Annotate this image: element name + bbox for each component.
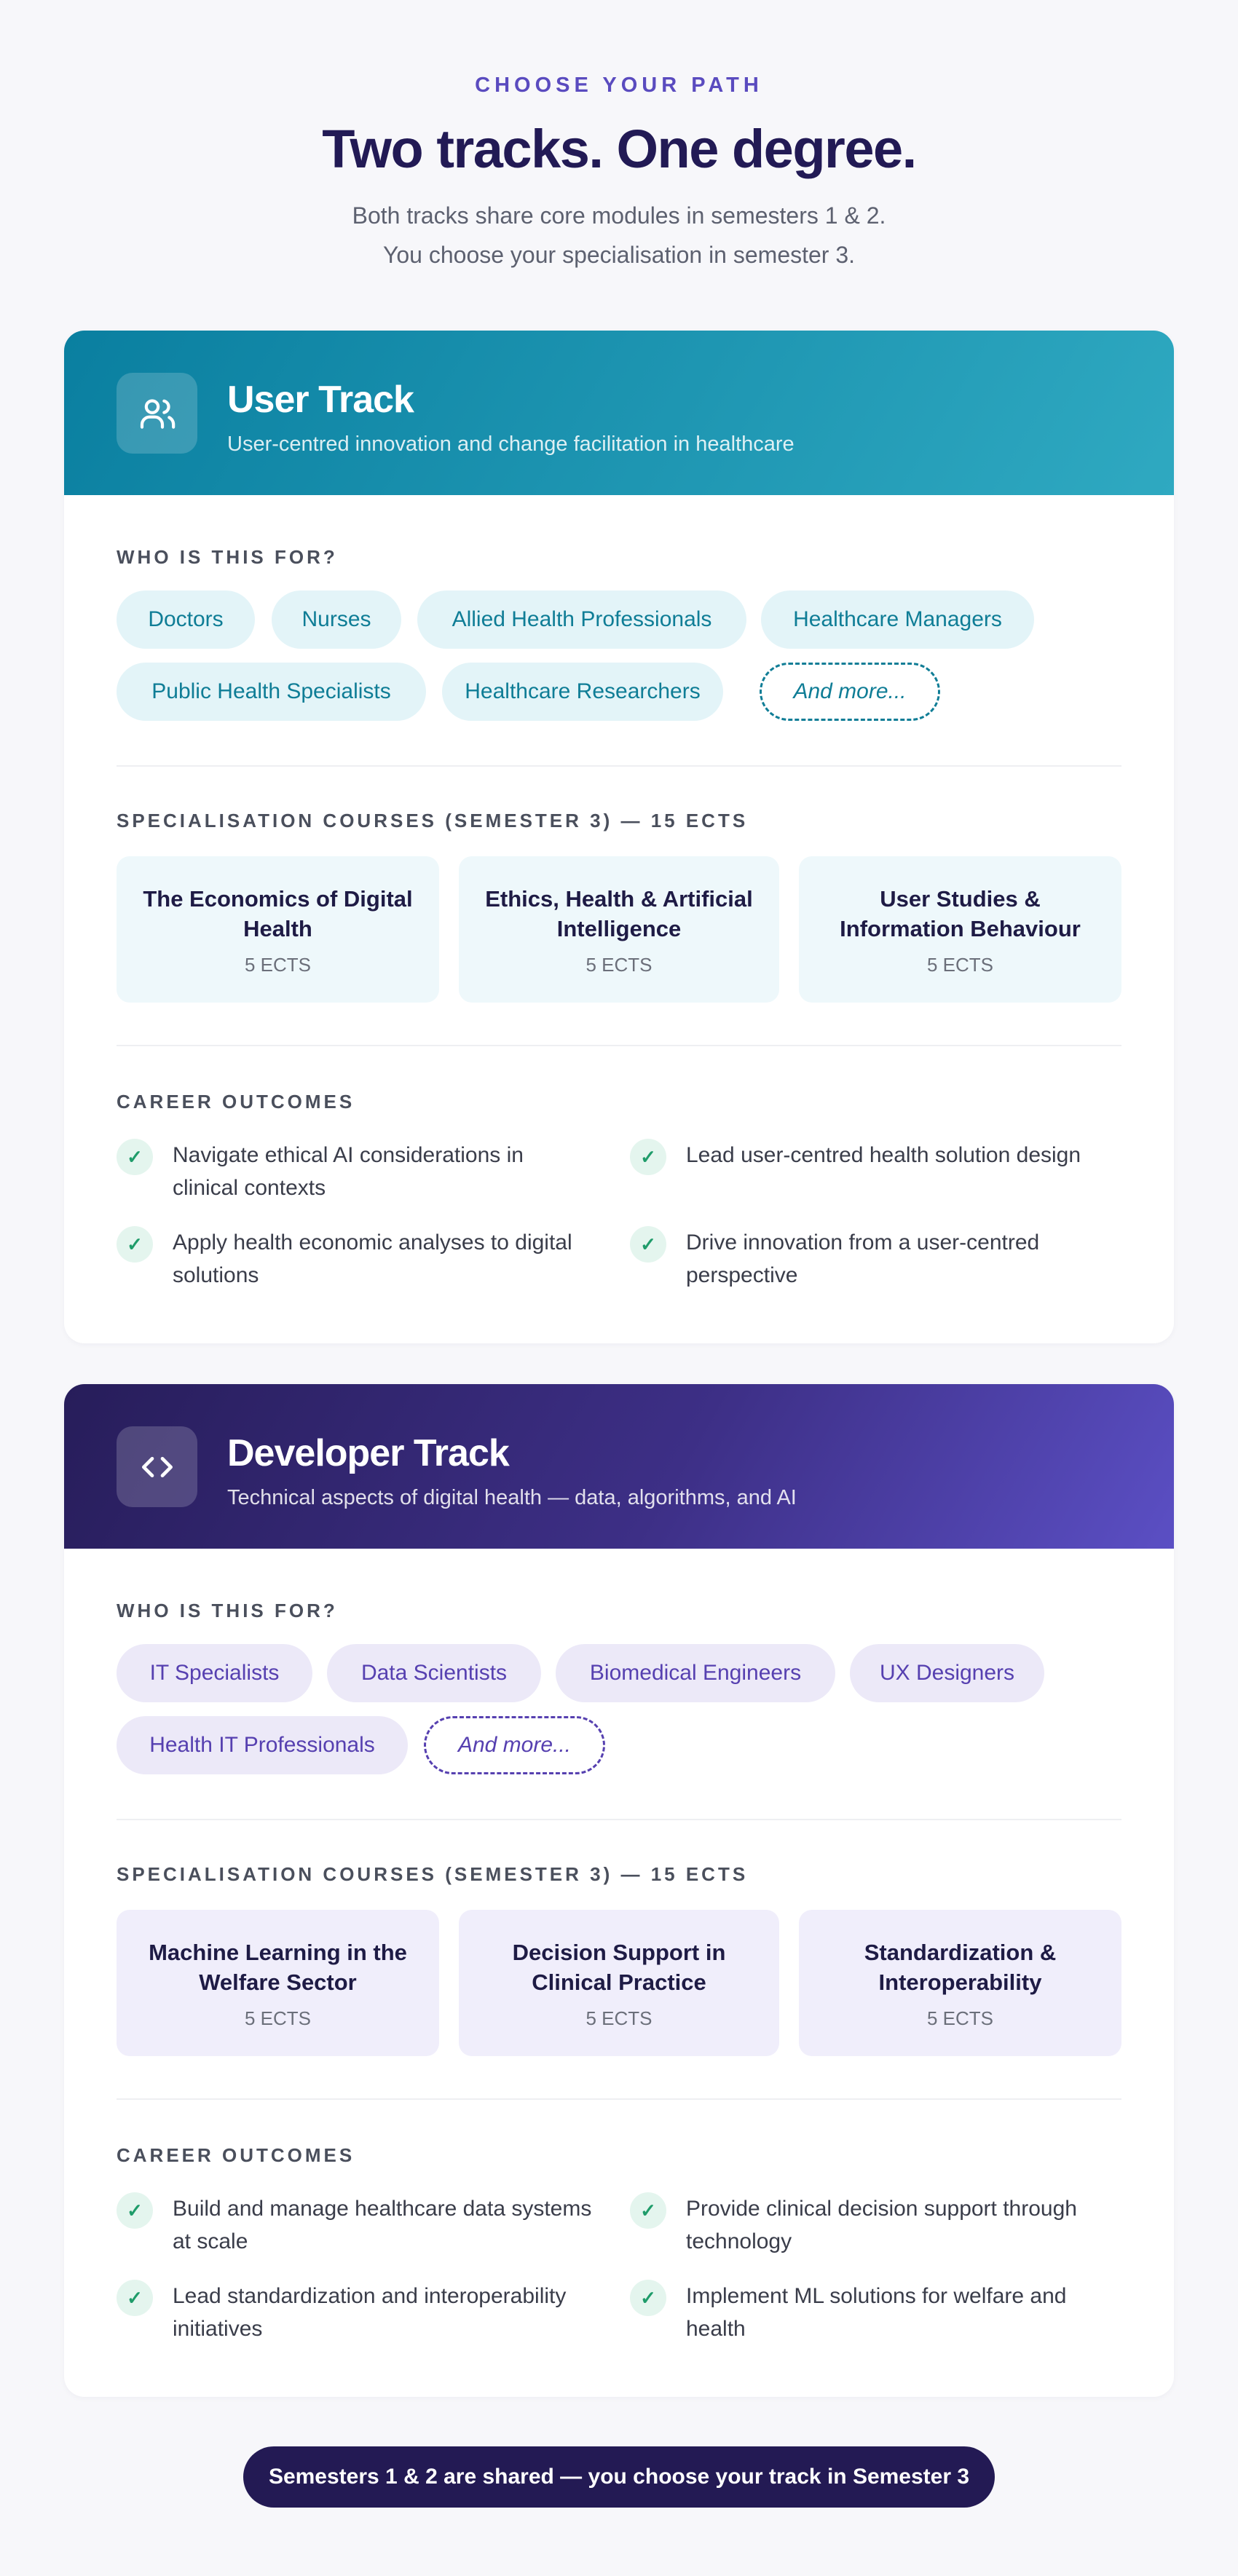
chips: audience: And more... [458, 1733, 571, 1757]
career outcomes list: initiatives [173, 2317, 262, 2341]
course cards [117, 1910, 1121, 2056]
career outcomes list: Implement ML solutions for welfare and [686, 2284, 1066, 2308]
chips: audience: Healthcare Managers [793, 607, 1002, 631]
course cards: Clinical Practice [532, 1969, 706, 1995]
footer pill: Semesters 1 & 2 are shared — you choose your track in Semester 3 [269, 2465, 969, 2489]
course cards: 5 ECTS [245, 954, 311, 976]
label: who: WHO IS THIS FOR? [117, 1600, 338, 1621]
chips: audience: Data Scientists [361, 1661, 507, 1685]
course cards: Standardization & [864, 1940, 1056, 1965]
chips: audience: Healthcare Researchers [465, 679, 701, 703]
footer pill [243, 2446, 995, 2508]
eyebrow: CHOOSE YOUR PATH [475, 74, 763, 97]
career outcomes list [117, 1139, 1081, 1287]
panel: user track [64, 331, 1174, 1343]
course cards: Health [243, 916, 312, 941]
career outcomes list [117, 2192, 1077, 2341]
career outcomes list: ✓ [127, 1146, 143, 1168]
career outcomes list: ✓ [640, 2199, 656, 2221]
subtitle: You choose your specialisation in semester 3. [383, 242, 855, 268]
label: courses: SPECIALISATION COURSES (SEMESTER 3) — 15 ECTS [117, 810, 748, 831]
course cards: 5 ECTS [927, 2007, 993, 2029]
career outcomes list: perspective [686, 1263, 797, 1287]
career outcomes list: clinical contexts [173, 1176, 326, 1200]
career outcomes list: Provide clinical decision support through [686, 2197, 1077, 2221]
career outcomes list: at scale [173, 2229, 248, 2253]
track subtitle: User-centred innovation and change facilitation in healthcare [227, 432, 795, 456]
career outcomes list: solutions [173, 1263, 259, 1287]
course cards: 5 ECTS [586, 954, 652, 976]
course cards: 5 ECTS [586, 2007, 652, 2029]
career outcomes list: Apply health economic analyses to digital [173, 1230, 572, 1255]
track subtitle: Technical aspects of digital health — data, algorithms, and AI [227, 1486, 797, 1509]
career outcomes list: Navigate ethical AI considerations in [173, 1143, 524, 1167]
career outcomes list: Drive innovation from a user-centred [686, 1230, 1039, 1255]
career outcomes list: ✓ [640, 1233, 656, 1255]
subtitle [352, 202, 886, 268]
label: career: CAREER OUTCOMES [117, 2144, 355, 2166]
chips: audience: Public Health Specialists [151, 679, 391, 703]
header: developer track [64, 1384, 1174, 1549]
panel: developer track [64, 1384, 1174, 2397]
chips: audience: UX Designers [880, 1661, 1014, 1685]
label: courses: SPECIALISATION COURSES (SEMESTER 3) — 15 ECTS [117, 1863, 748, 1885]
chips: audience: Doctors [148, 607, 224, 631]
course cards: Information Behaviour [840, 916, 1081, 941]
career outcomes list: ✓ [127, 2286, 143, 2308]
course cards: The Economics of Digital [143, 886, 413, 912]
title: Two tracks. One degree. [322, 119, 916, 179]
career outcomes list: health [686, 2317, 746, 2341]
career outcomes list: Build and manage healthcare data systems [173, 2197, 591, 2221]
icon: code [117, 1426, 197, 1507]
career outcomes list: ✓ [640, 2286, 656, 2308]
chips: audience [117, 590, 1034, 721]
chips: audience: Nurses [301, 607, 371, 631]
course cards [117, 856, 1121, 1003]
course cards: 5 ECTS [927, 954, 993, 976]
career outcomes list: Lead standardization and interoperability [173, 2284, 566, 2308]
career outcomes list: Lead user-centred health solution design [686, 1143, 1081, 1167]
chips: audience [117, 1644, 1044, 1774]
chips: audience: And more... [793, 679, 907, 703]
chips: audience: IT Specialists [150, 1661, 279, 1685]
career outcomes list: ✓ [127, 1233, 143, 1255]
course cards: 5 ECTS [245, 2007, 311, 2029]
subtitle: Both tracks share core modules in semesters 1 & 2. [352, 202, 886, 229]
career outcomes list: ✓ [640, 1146, 656, 1168]
course cards: Intelligence [557, 916, 681, 941]
chips: audience: Biomedical Engineers [590, 1661, 801, 1685]
icon: users [117, 373, 197, 454]
chips: audience: Allied Health Professionals [452, 607, 711, 631]
career outcomes list: technology [686, 2229, 792, 2253]
track title: User Track [227, 379, 414, 421]
label: who: WHO IS THIS FOR? [117, 546, 338, 568]
course cards: Ethics, Health & Artificial [485, 886, 753, 912]
chips: audience: Health IT Professionals [149, 1733, 375, 1757]
course cards: Decision Support in [513, 1940, 725, 1965]
track title: Developer Track [227, 1432, 509, 1474]
course cards: Interoperability [879, 1969, 1041, 1995]
course cards: Welfare Sector [199, 1969, 357, 1995]
label: career: CAREER OUTCOMES [117, 1091, 355, 1113]
course cards: User Studies & [880, 886, 1041, 912]
career outcomes list: ✓ [127, 2199, 143, 2221]
header: user track [64, 331, 1174, 495]
course cards: Machine Learning in the [149, 1940, 407, 1965]
